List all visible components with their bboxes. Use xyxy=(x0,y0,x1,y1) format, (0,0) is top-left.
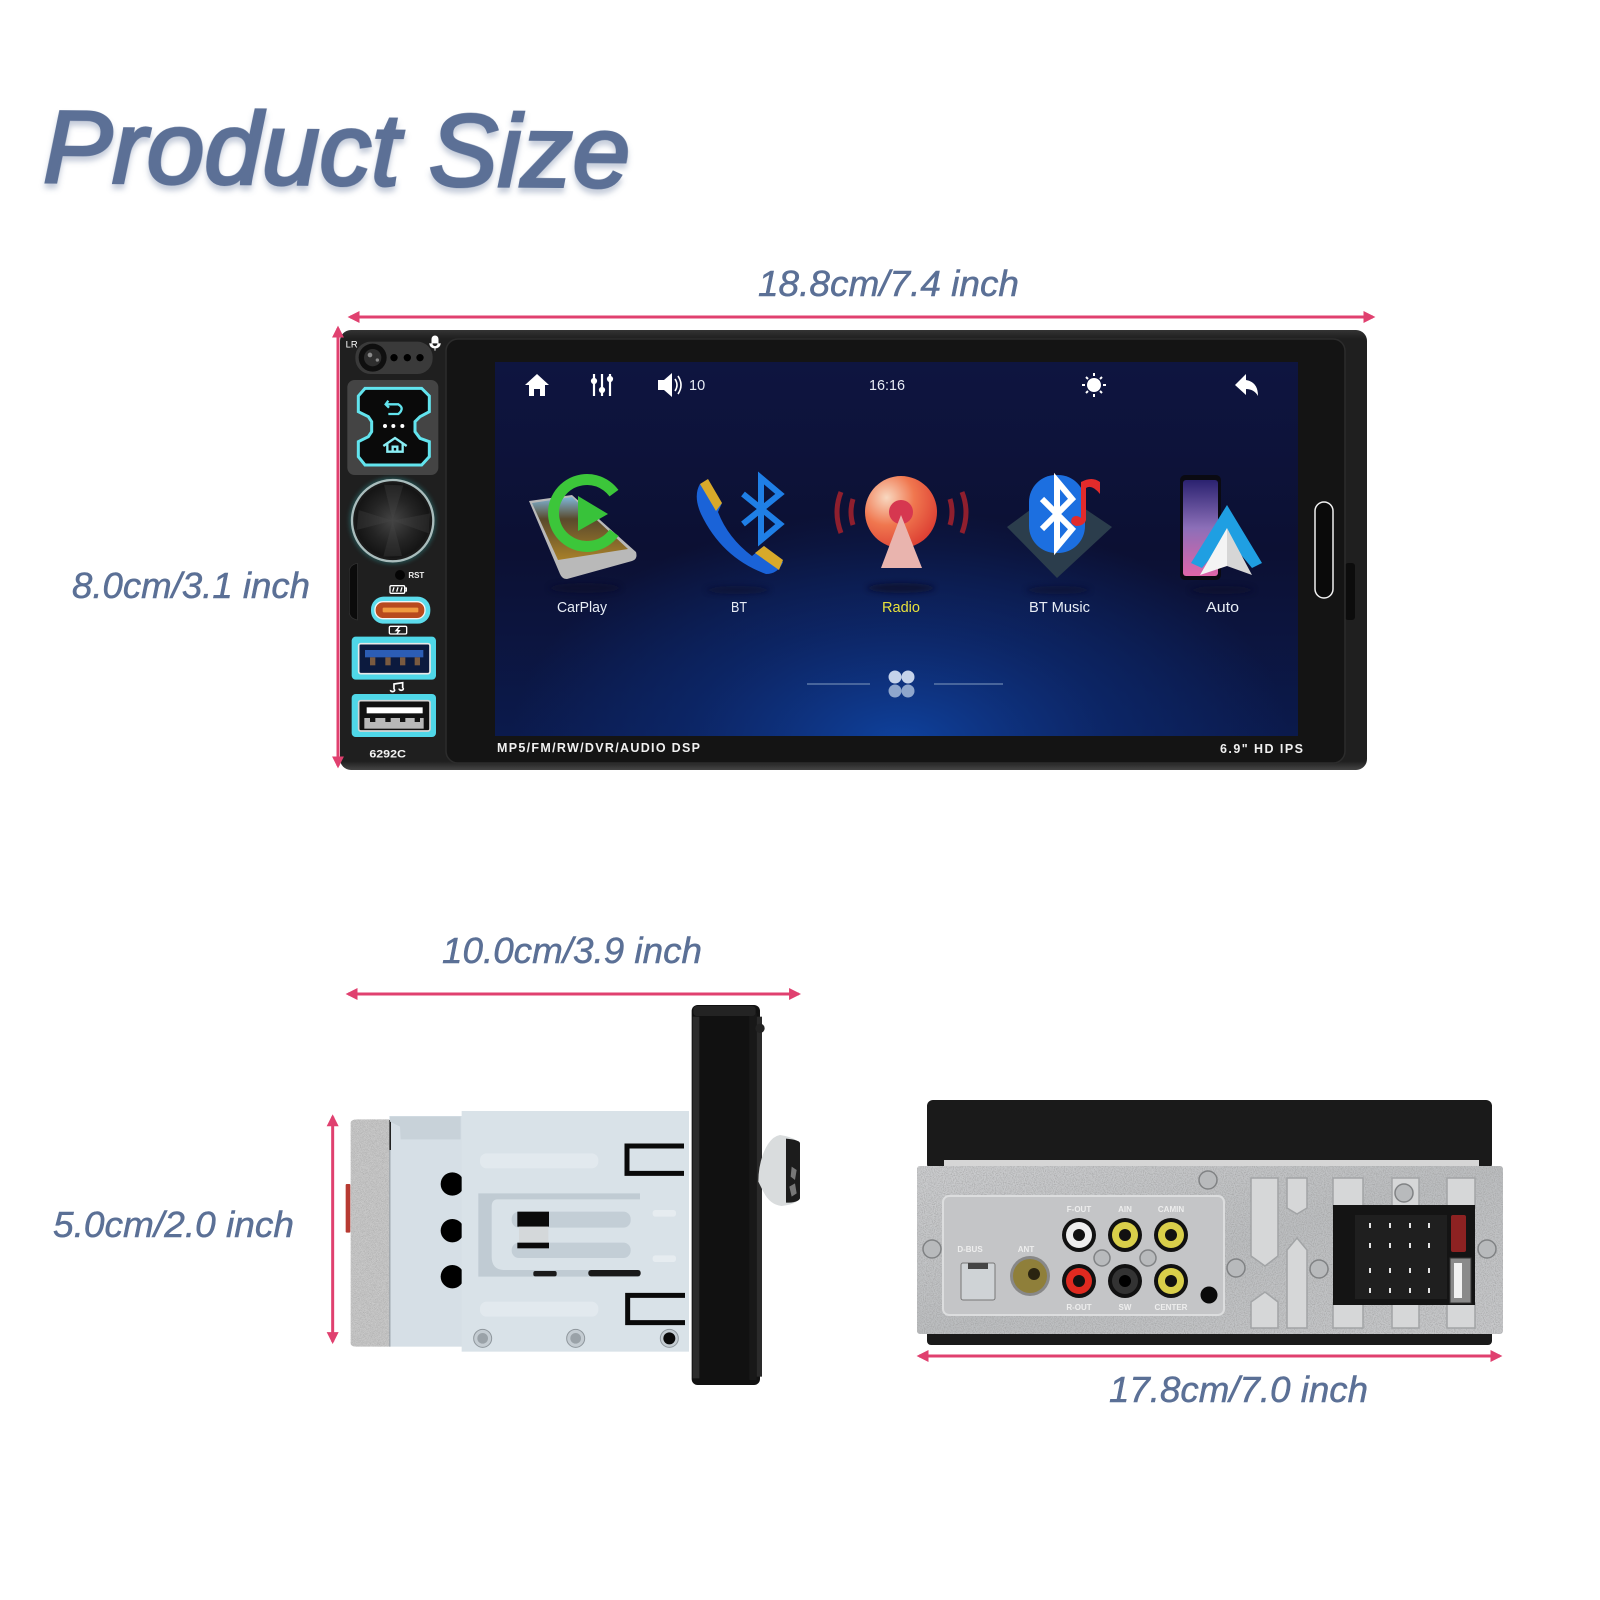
jack labels: AIN xyxy=(1118,1205,1132,1214)
reset: RST xyxy=(408,571,424,580)
arrow: front height xyxy=(336,328,340,766)
ISO connector block xyxy=(1333,1205,1475,1305)
icon: brightness xyxy=(1082,373,1106,397)
handle slot xyxy=(1315,502,1333,598)
icon: radio xyxy=(837,476,966,593)
label: CarPlay xyxy=(557,599,607,616)
arrow: chassis height xyxy=(328,1117,337,1342)
title: Product Size xyxy=(43,90,631,209)
jack labels: ANT xyxy=(1018,1245,1034,1254)
dimension label: width of front: 18.8cm/7.4 inch xyxy=(758,263,1019,304)
arrow: depth xyxy=(348,989,799,998)
label: BT Music xyxy=(1029,599,1090,616)
bezel text: features: MP5/FM/RW/DVR/AUDIO DSP xyxy=(497,741,700,755)
USB-C port xyxy=(371,597,430,624)
bezel text: screen size: 6.9" HD IPS xyxy=(1220,742,1303,756)
screws xyxy=(923,1171,1496,1278)
unit body xyxy=(340,330,1367,770)
icon: CarPlay xyxy=(529,466,636,593)
control column xyxy=(346,336,440,761)
icon: BT handset xyxy=(697,478,783,594)
rear chassis plate xyxy=(389,1116,464,1347)
side view knob xyxy=(758,1135,800,1206)
silver end block xyxy=(351,1119,389,1347)
front view of head unit xyxy=(340,330,1367,770)
jack labels: CENTER xyxy=(1155,1303,1188,1312)
red tab xyxy=(346,1184,350,1233)
arrow: front width xyxy=(350,316,1373,318)
jack labels: R-OUT xyxy=(1066,1303,1092,1312)
icon: speaker xyxy=(658,373,681,397)
icon: equalizer xyxy=(592,374,612,396)
rear USB xyxy=(1450,1258,1471,1303)
arrow: chassis width xyxy=(919,1354,1500,1358)
inner bezel xyxy=(446,339,1345,763)
volume value: 10 xyxy=(689,378,705,394)
app: BT xyxy=(697,478,783,616)
USB 3 port xyxy=(352,637,436,680)
status bar icons xyxy=(525,373,1258,397)
icon: back xyxy=(1235,374,1258,396)
label: Radio xyxy=(882,599,920,616)
app: Radio xyxy=(837,476,966,616)
label: BT xyxy=(731,599,747,616)
jack labels: SW xyxy=(1119,1303,1132,1312)
USB 2 port xyxy=(352,694,436,737)
screen xyxy=(495,362,1298,736)
side nub xyxy=(1345,563,1355,620)
app: BT Music xyxy=(1007,475,1112,616)
label: Auto xyxy=(1206,599,1239,616)
mic and IR cluster xyxy=(346,336,440,374)
antenna socket xyxy=(1010,1256,1050,1296)
SD slot xyxy=(349,563,357,620)
plate cut-outs xyxy=(1251,1178,1475,1328)
volume knob xyxy=(349,477,436,564)
jack labels: CAMIN xyxy=(1158,1205,1184,1214)
icon: BT Music xyxy=(1007,475,1112,594)
spring window xyxy=(478,1193,676,1277)
page indicator xyxy=(807,670,1003,698)
icon: home xyxy=(525,374,549,396)
jack labels xyxy=(957,1205,1188,1312)
clock: 16:16 xyxy=(869,377,905,394)
recessed jack panel xyxy=(943,1196,1224,1315)
fuse xyxy=(1451,1215,1466,1252)
side view of head unit xyxy=(333,994,800,1385)
RCA jacks xyxy=(1062,1218,1188,1298)
black housing bottom xyxy=(927,1325,1492,1345)
black housing top xyxy=(927,1100,1492,1170)
model number: 6292C xyxy=(369,749,406,761)
rear view of head unit xyxy=(917,1100,1503,1345)
jack labels: F-OUT xyxy=(1067,1205,1091,1214)
dimension label: chassis width: 17.8cm/7.0 inch xyxy=(1109,1369,1368,1410)
dimension label: chassis height: 5.0cm/2.0 inch xyxy=(53,1204,294,1245)
mounting screws xyxy=(474,1329,678,1347)
app: Auto xyxy=(1180,475,1262,616)
icon: charging xyxy=(389,626,407,634)
dimension label: depth: 10.0cm/3.9 inch xyxy=(442,930,702,971)
icon: battery xyxy=(390,586,406,593)
icon: music note xyxy=(391,683,403,692)
mic and IR cluster: LR xyxy=(346,339,358,349)
main chassis plate xyxy=(462,1111,689,1352)
top lip xyxy=(944,1160,1479,1166)
small connector xyxy=(961,1263,995,1300)
dimension label: height of front: 8.0cm/3.1 inch xyxy=(72,565,310,606)
jack labels: D-BUS xyxy=(957,1245,983,1254)
mic jack xyxy=(1200,1286,1218,1304)
reset xyxy=(395,570,424,580)
touch button panel xyxy=(347,380,438,475)
bracket slots xyxy=(627,1146,684,1173)
icon: Android Auto xyxy=(1180,475,1262,594)
front panel edge xyxy=(692,1005,765,1385)
app: CarPlay xyxy=(529,466,636,616)
metal back plate xyxy=(917,1166,1503,1334)
